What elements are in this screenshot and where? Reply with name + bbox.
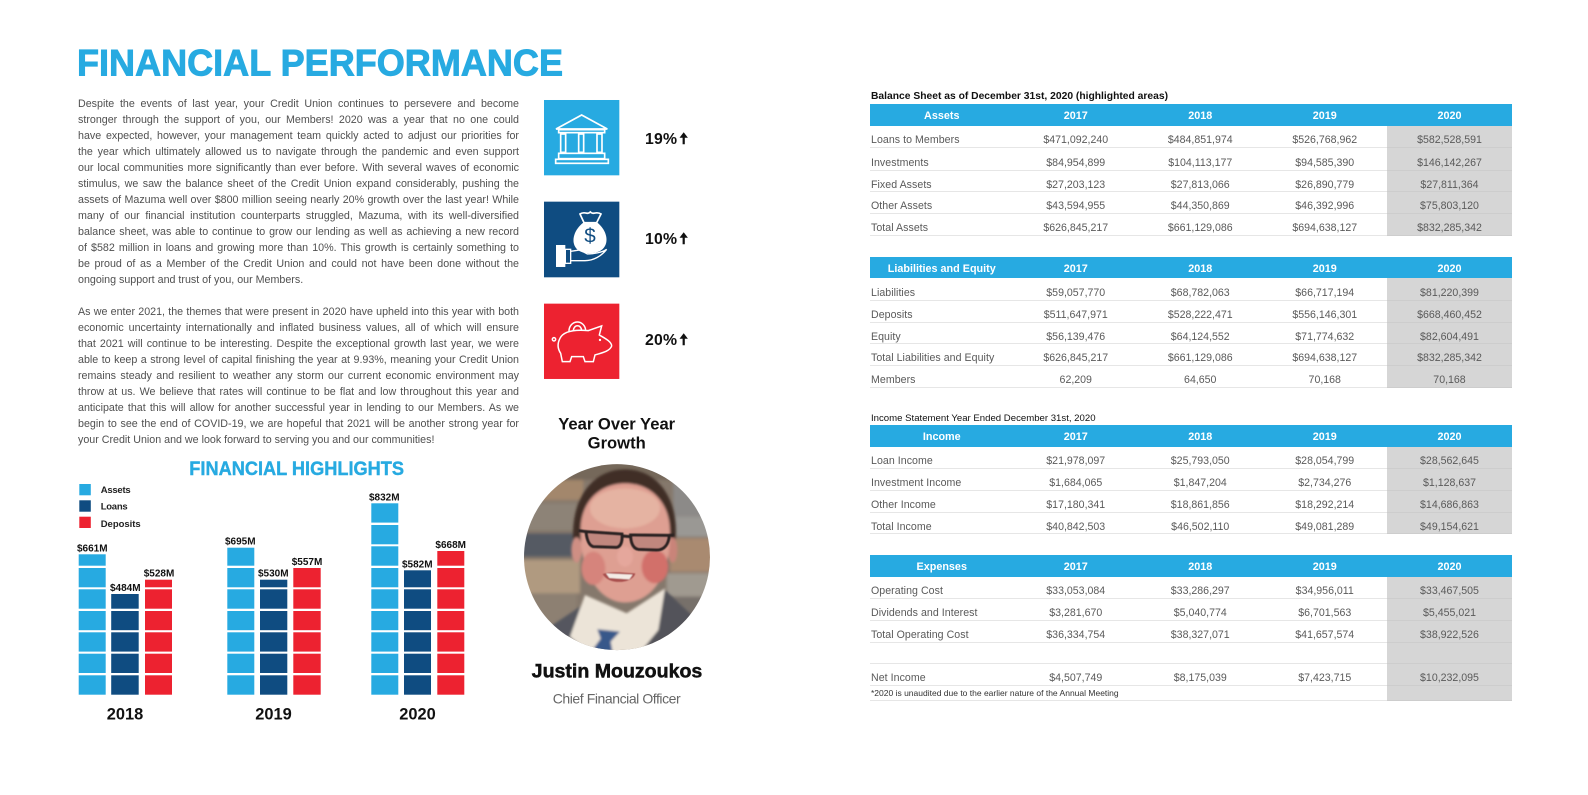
table: expenses: $34,956,011	[1296, 585, 1354, 597]
bar value labels: $668M	[435, 540, 466, 551]
table: income: Investment Income	[871, 477, 961, 489]
table: liabilities and equity: $81,220,399	[1420, 286, 1479, 298]
table: liabilities and equity: $511,647,971	[1044, 309, 1108, 321]
table: expenses: $4,507,749	[1049, 672, 1102, 684]
table: liabilities and equity: $64,124,552	[1171, 330, 1230, 342]
table: liabilities and equity: 2017	[1064, 262, 1088, 274]
table: expenses: 2020	[1437, 561, 1462, 573]
table: income: 2019	[1313, 431, 1337, 443]
table: liabilities and equity: $66,717,194	[1295, 286, 1354, 298]
icon: money bag on navy tile	[544, 202, 619, 277]
table: expenses: $6,701,563	[1298, 607, 1351, 619]
table: assets: Loans to Members	[871, 134, 960, 146]
bar value labels: $832M	[369, 492, 400, 503]
heading: year over year growth: Growth	[588, 434, 646, 453]
table: expenses: Total Operating Cost	[871, 629, 969, 641]
portrait photo	[524, 464, 710, 650]
table: expenses: $33,053,084	[1046, 585, 1105, 597]
body text: Despite the events of last year, your Credit Union continues to persevere and become	[78, 98, 519, 110]
job title: Chief Financial Officer	[553, 690, 681, 706]
table: liabilities and equity: $694,638,127	[1292, 352, 1357, 364]
table: liabilities and equity: 2020	[1437, 262, 1462, 274]
body text: that 2021 will continue to be interesting. Despite the exceptional growth last year, we were	[78, 338, 519, 350]
table: liabilities and equity: $56,139,476	[1046, 330, 1105, 342]
table: liabilities and equity: Deposits	[871, 309, 913, 321]
table: assets: Investments	[871, 156, 929, 168]
table: liabilities and equity: 64,650	[1184, 374, 1216, 386]
year labels	[107, 706, 436, 724]
table: assets: $27,813,066	[1171, 178, 1230, 190]
table: expenses: $41,657,574	[1295, 629, 1354, 641]
table: liabilities and equity: $71,774,632	[1295, 330, 1354, 342]
table: assets: $471,092,240	[1043, 134, 1108, 146]
table: expenses: 2017	[1064, 561, 1088, 573]
table: income: $49,081,289	[1295, 520, 1354, 532]
table: income: 2018	[1188, 431, 1212, 443]
table: income: $28,562,645	[1420, 455, 1479, 467]
table: assets: $661,129,086	[1168, 222, 1233, 234]
year labels: 2019	[255, 706, 292, 724]
body text: have expected, however, your management team quickly acted to adjust our priorities for	[78, 130, 519, 142]
body text: stronger through the support of you, our Members! 2020 was a year that no one could	[78, 114, 519, 126]
table: income: 2020	[1437, 431, 1462, 443]
icon: piggy bank on red tile	[544, 304, 619, 379]
table: liabilities and equity: Members	[871, 374, 916, 386]
body text	[78, 98, 519, 446]
bar chart	[70, 492, 470, 724]
table: assets: $27,203,123	[1046, 178, 1105, 190]
table: assets: $44,350,869	[1171, 200, 1230, 212]
income statement caption: Income Statement Year Ended December 31st, 2020	[871, 412, 1096, 424]
bar value labels: $695M	[225, 537, 256, 548]
icon: bank on blue tile	[544, 100, 619, 175]
body text: of $582 million in loans and growing more than 10%. This growth is certainly something to	[78, 242, 519, 254]
table: liabilities and equity	[870, 257, 1512, 388]
table: expenses	[870, 555, 1512, 701]
body text: your Credit Union and we look forward to serving you and our communities!	[78, 434, 434, 446]
table: assets: $626,845,217	[1043, 222, 1108, 234]
table: income: $46,502,110	[1171, 520, 1229, 532]
table: assets: 2020	[1437, 110, 1462, 122]
name: Justin Mouzoukos	[532, 660, 702, 682]
bar value labels: $528M	[144, 569, 174, 580]
table: assets: 2018	[1188, 110, 1212, 122]
body text: begin to see the end of COVID-19, we are hopeful that 2021 will be another strong year for	[78, 418, 519, 430]
table: assets: Total Assets	[871, 222, 928, 234]
table: expenses: $8,175,039	[1174, 672, 1227, 684]
bar value labels: $661M	[77, 543, 108, 554]
table: income: $1,128,637	[1423, 477, 1476, 489]
table: assets: $94,585,390	[1295, 156, 1354, 168]
table: income: 2017	[1064, 431, 1088, 443]
table: liabilities and equity: $626,845,217	[1043, 352, 1108, 364]
heading: year over year growth: Year Over Year	[558, 414, 676, 433]
table: assets: Assets	[924, 110, 959, 122]
bars 2018	[79, 554, 172, 695]
table: income: $18,292,214	[1295, 499, 1354, 511]
table: liabilities and equity: 70,168	[1433, 374, 1466, 386]
table: expenses: $33,467,505	[1420, 585, 1479, 597]
table: assets: $75,803,120	[1420, 200, 1479, 212]
table: assets: $832,285,342	[1417, 222, 1482, 234]
balance sheet caption: Balance Sheet as of December 31st, 2020 (highlighted areas)	[871, 91, 1168, 102]
table: income: $2,734,276	[1298, 477, 1351, 489]
table: expenses: 2018	[1188, 561, 1212, 573]
bar value labels	[77, 492, 466, 594]
table: liabilities and equity: $68,782,063	[1171, 286, 1230, 298]
body text: many of our financial institution counterparts struggled, Mazuma, with its well-diversified	[78, 210, 519, 222]
table: liabilities and equity: Liabilities and Equity	[888, 262, 996, 274]
table: liabilities and equity: 62,209	[1060, 374, 1092, 386]
table: liabilities and equity: 2019	[1313, 262, 1337, 274]
table: expenses: Dividends and Interest	[871, 607, 978, 619]
table: expenses: Expenses	[917, 561, 967, 573]
table: assets: $84,954,899	[1046, 156, 1105, 168]
table: assets: $104,113,177	[1168, 156, 1232, 168]
table: liabilities and equity: $528,222,471	[1168, 309, 1233, 321]
table: income: $18,861,856	[1171, 499, 1230, 511]
body text: ongoing support and trust of you, our Members.	[78, 274, 303, 286]
table: income: Loan Income	[871, 455, 933, 467]
table: liabilities and equity: $59,057,770	[1046, 286, 1105, 298]
bars 2019	[227, 548, 321, 695]
table: assets	[870, 104, 1512, 236]
table: assets: $484,851,974	[1168, 134, 1233, 146]
body text: As we enter 2021, the themes that were present in 2020 have upheld into this year with both	[78, 306, 519, 318]
body text: throw at us. We believe that rates will continue to be flat and low throughout this year and	[78, 386, 519, 398]
table: liabilities and equity: $668,460,452	[1417, 309, 1482, 321]
table: income: Other Income	[871, 499, 936, 511]
table: expenses: 2019	[1313, 561, 1337, 573]
table: liabilities and equity: Liabilities	[871, 286, 915, 298]
table: assets: Other Assets	[871, 200, 932, 212]
body text: balance sheet, was able to continue to grow our lending as well as achieving a new record	[78, 226, 519, 238]
body text: our local communities more significantly than ever before. With several waves of economic	[78, 162, 519, 174]
body text: assets of Mazuma well over $800 million seeing nearly 20% growth over the last year! While	[78, 194, 519, 206]
table: liabilities and equity: $556,146,301	[1292, 309, 1357, 321]
table: assets: $27,811,364	[1420, 178, 1479, 190]
table: expenses: Operating Cost	[871, 585, 943, 597]
legend: Loans	[101, 502, 128, 513]
table: income: $28,054,799	[1295, 455, 1354, 467]
stat: assets growth: 19%	[645, 131, 677, 148]
table: liabilities and equity: 2018	[1188, 262, 1212, 274]
table: expenses: $38,327,071	[1171, 629, 1230, 641]
legend: Deposits	[101, 519, 141, 530]
table: expenses: $36,334,754	[1046, 629, 1105, 641]
body text: stimulus, we saw the balance sheet of the Credit Union expand considerably, pushing the	[78, 178, 519, 190]
table: income: $49,154,621	[1420, 520, 1479, 532]
body text: the year which ultimately allowed us to navigate through the pandemic and even support	[78, 146, 519, 158]
table: expenses: $3,281,670	[1049, 607, 1102, 619]
legend: Assets	[101, 485, 131, 496]
body text: able to keep a strong level of capital finishing the year at 9.93%, meaning your Credit Union	[78, 354, 519, 366]
table: assets: $526,768,962	[1292, 134, 1357, 146]
table: expenses: Net Income	[871, 672, 926, 684]
table: expenses: $33,286,297	[1171, 585, 1230, 597]
table: liabilities and equity: $82,604,491	[1420, 330, 1479, 342]
table: assets: $46,392,996	[1295, 200, 1354, 212]
bar value labels: $530M	[258, 569, 289, 580]
table: liabilities and equity: Equity	[871, 330, 901, 342]
table: liabilities and equity: $832,285,342	[1417, 352, 1482, 364]
stat: deposits growth: 20%	[645, 332, 677, 349]
table: liabilities and equity: Total Liabilities and Equity	[871, 352, 994, 364]
table: expenses: $5,040,774	[1174, 607, 1227, 619]
table: income	[870, 425, 1512, 534]
table: assets: 2017	[1064, 110, 1088, 122]
table: expenses: $5,455,021	[1423, 607, 1476, 619]
title: FINANCIAL PERFORMANCE	[77, 43, 563, 84]
bar value labels: $582M	[402, 560, 433, 571]
table: expenses: $7,423,715	[1298, 672, 1351, 684]
table: expenses: $10,232,095	[1420, 672, 1479, 684]
heading: financial highlights: FINANCIAL HIGHLIGHTS	[189, 458, 404, 480]
bars 2020	[371, 503, 464, 695]
body text: remains steady and resilient to weather any storm our current economic environment may	[78, 370, 519, 382]
year labels: 2020	[399, 706, 436, 724]
table: assets: $43,594,955	[1046, 200, 1105, 212]
table: income: $17,180,341	[1046, 499, 1105, 511]
table: expenses: *2020 is unaudited due to the earlier nature of the Annual Meeting	[871, 688, 1119, 698]
legend	[79, 484, 141, 530]
table: income: Total Income	[871, 520, 932, 532]
table: assets: $582,528,591	[1417, 134, 1482, 146]
table: income: $40,842,503	[1046, 520, 1105, 532]
table: income: $21,978,097	[1046, 455, 1105, 467]
table: assets: $694,638,127	[1292, 222, 1357, 234]
table: income: $1,847,204	[1174, 477, 1227, 489]
bar value labels: $484M	[110, 583, 141, 594]
heading: year over year growth	[558, 414, 676, 453]
body text: anticipate that this will allow for another successful year in lending to our Members. As we	[78, 402, 519, 414]
table: income: $14,686,863	[1420, 499, 1479, 511]
table: assets: 2019	[1313, 110, 1337, 122]
table: income: Income	[923, 431, 961, 443]
table: liabilities and equity: $661,129,086	[1168, 352, 1233, 364]
table: income: $25,793,050	[1171, 455, 1230, 467]
year labels: 2018	[107, 706, 143, 724]
table: assets: $146,142,267	[1417, 156, 1482, 168]
table: assets: Fixed Assets	[871, 178, 932, 190]
table: assets: $26,890,779	[1295, 178, 1354, 190]
table: expenses: $38,922,526	[1420, 629, 1479, 641]
stat: loans growth: 10%	[645, 231, 677, 248]
body text: be proud of as a Member of the Credit Union and could not have been done without the	[78, 258, 519, 270]
body text: economic uncertainty internationally and inflated business values, all of which will ensure	[78, 322, 519, 334]
icon: money bag on navy tile: $	[584, 225, 596, 248]
table: liabilities and equity: 70,168	[1309, 374, 1341, 386]
table: income: $1,684,065	[1049, 477, 1102, 489]
bar value labels: $557M	[292, 557, 322, 568]
